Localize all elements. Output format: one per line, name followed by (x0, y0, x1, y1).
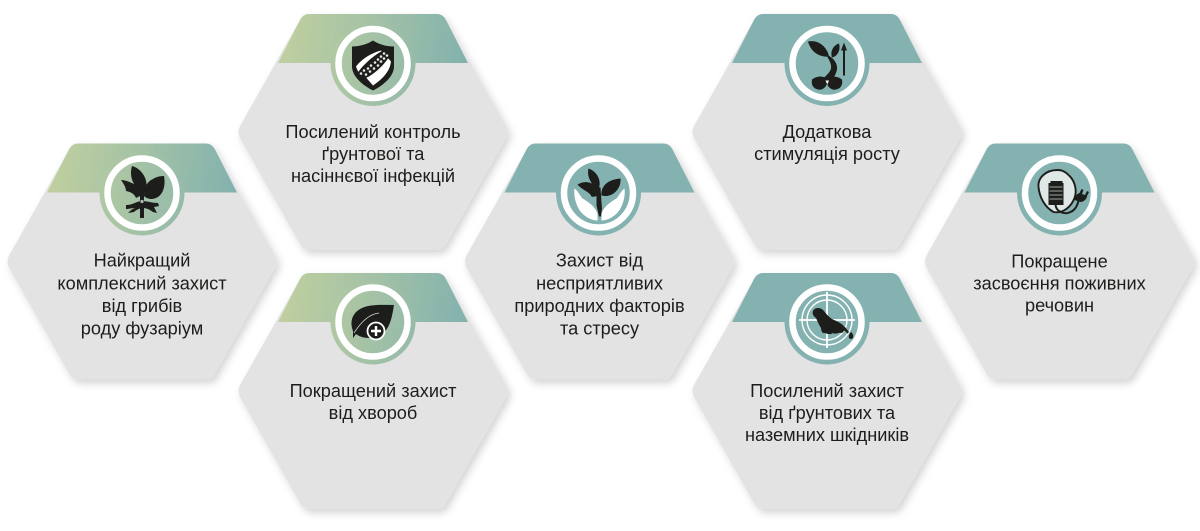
header band (732, 14, 922, 63)
text block: Посилений захист (750, 381, 905, 401)
panel: protection from adverse factors and stress (465, 144, 734, 380)
hexagon background (465, 144, 734, 380)
hexagon background (238, 273, 508, 509)
panel: improved nutrient uptake: засвоєння поживних (973, 274, 1146, 294)
hexagon background (692, 14, 962, 250)
text block: Найкращий (94, 250, 190, 270)
header band (278, 273, 468, 322)
panel: improved nutrient uptake: речовин (1025, 296, 1094, 316)
header band (47, 144, 237, 192)
icon: pest in crosshair (784, 280, 870, 364)
panel: additional growth stimulation (692, 14, 962, 250)
text block: Покращений захист (290, 381, 457, 401)
text block: Додаткова (783, 122, 872, 142)
icon: leaf with plus (330, 280, 416, 364)
header band (504, 144, 694, 192)
icon: plant with roots (100, 150, 184, 236)
hexagon background (925, 144, 1194, 380)
hexagon background (8, 144, 276, 380)
header band (964, 144, 1154, 192)
panel: best complex protection (8, 144, 276, 380)
hexagon background (692, 273, 962, 509)
panel: protection from adverse factors and stress: та стресу (560, 318, 640, 338)
panel: soil and seed infection control (238, 14, 508, 250)
panel: protection from adverse factors and stress: несприятливих (536, 274, 663, 294)
panel: improved disease protection: від хвороб (329, 403, 417, 423)
text block: Покращене (1011, 252, 1108, 272)
hexagon background (238, 14, 508, 250)
icon: sprout with arrow (784, 21, 870, 106)
header band (732, 273, 922, 322)
panel: soil and seed infection control: ґрунтової та (322, 144, 425, 164)
panel: soil and seed infection control: насіннєвої інфекцій (291, 166, 455, 186)
panel: soil and ground pest protection: від ґрунтових та (759, 403, 896, 423)
panel: improved disease protection (238, 273, 508, 509)
icon: battery with plug (1017, 150, 1102, 236)
panel: best complex protection: комплексний захист (57, 274, 227, 294)
icon: shield with corn (330, 21, 416, 106)
panel: improved nutrient uptake (925, 144, 1194, 380)
panel: best complex protection: від грибів (102, 296, 182, 316)
panel: soil and ground pest protection: наземних шкідників (745, 425, 909, 445)
panel: best complex protection: роду фузаріум (81, 318, 203, 338)
panel: soil and ground pest protection (692, 273, 962, 509)
panel: additional growth stimulation: стимуляція росту (754, 144, 901, 164)
panel: protection from adverse factors and stress: природних факторів (514, 296, 685, 316)
text block: Захист від (556, 250, 643, 270)
icon: plant in hands (556, 150, 641, 236)
text block: Посилений контроль (285, 122, 461, 142)
header band (278, 14, 468, 63)
